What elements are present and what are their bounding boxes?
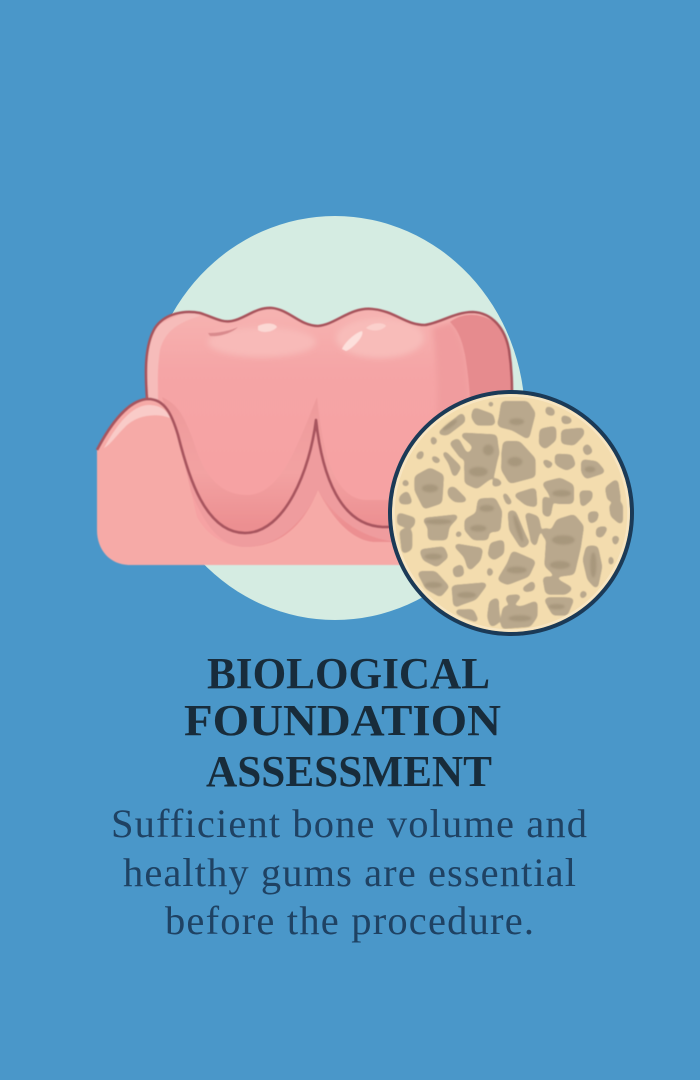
title: [184, 649, 501, 796]
gum margin band: [162, 397, 420, 547]
title: BIOLOGICAL: [207, 649, 490, 698]
title: FOUNDATION: [184, 696, 501, 745]
highlight: [104, 405, 170, 448]
front bone-side gum: [97, 399, 420, 565]
trabecular pores: [399, 403, 621, 627]
icon: magnified bone cross-section: [390, 392, 632, 634]
illustration: gums and bone: [97, 216, 632, 634]
outline of back gum: [146, 308, 512, 400]
description text: Sufficient bone volume and: [111, 801, 587, 846]
pale inner rim: [394, 396, 628, 630]
back gum shape: [146, 308, 512, 560]
gum shading and highlights: [147, 310, 515, 480]
icon: gum tissue: [97, 308, 515, 565]
title: ASSESSMENT: [206, 747, 492, 796]
description text: before the procedure.: [165, 898, 534, 943]
band below margin line: [183, 420, 420, 547]
description text: [111, 801, 587, 943]
mint backdrop circle: [145, 216, 525, 620]
bone disc: [390, 392, 632, 634]
description text: healthy gums are essential: [123, 850, 576, 895]
gum margin line: [97, 399, 420, 533]
darker pore mottling: [422, 418, 596, 621]
